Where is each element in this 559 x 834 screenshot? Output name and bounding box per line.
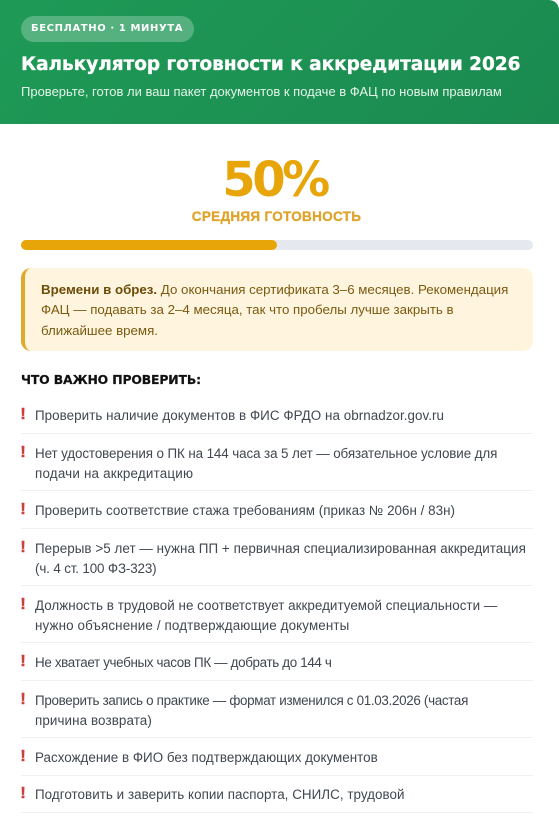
checklist heading: ЧТО ВАЖНО ПРОВЕРИТЬ: <box>21 372 201 387</box>
item 8: ! <box>20 748 26 765</box>
item 3: Проверить соответствие стажа требованиям (приказ № 206н / 83н) <box>35 503 455 518</box>
badge: БЕСПЛАТНО · 1 МИНУТА <box>31 23 183 34</box>
badge <box>21 16 194 42</box>
progress bar <box>21 240 533 250</box>
item 4: (ч. 4 ст. 100 ФЗ-323) <box>35 561 156 576</box>
item 6: Не хватает учебных часов ПК — добрать до 144 ч <box>35 655 332 670</box>
item 8: Расхождение в ФИО без подтверждающих документов <box>35 750 378 765</box>
item 7: Проверить запись о практике — формат изменился с 01.03.2026 (частая <box>35 693 468 708</box>
item 1: ! <box>20 406 26 423</box>
checklist <box>20 406 533 813</box>
item 5: нужно объяснение / подтверждающие документы <box>35 618 349 633</box>
item 7 <box>20 691 468 728</box>
callout text: ФАЦ — подавать за 2–4 месяца, так что пробелы лучше закрыть в <box>41 302 454 317</box>
callout <box>21 268 533 351</box>
item 6: ! <box>20 653 26 670</box>
item 9: Подготовить и заверить копии паспорта, СНИЛС, трудовой <box>35 787 404 802</box>
item 2: подачи на аккредитацию <box>35 466 193 481</box>
callout text: ближайшее время. <box>41 322 158 338</box>
item 2: ! <box>20 444 26 461</box>
item 1: Проверить наличие документов в ФИС ФРДО на obrnadzor.gov.ru <box>35 408 444 423</box>
item 3: ! <box>20 501 26 518</box>
item 7: ! <box>20 691 26 708</box>
callout text <box>41 282 508 338</box>
score value: 50% <box>222 152 327 208</box>
item 4: Перерыв >5 лет — нужна ПП + первичная специализированная аккредитация <box>35 541 526 556</box>
item 7: причина возврата) <box>35 713 152 728</box>
item 5: ! <box>20 596 26 613</box>
callout text: Времени в обрез. До окончания сертификата 3–6 месяцев. Рекомендация <box>41 282 508 296</box>
item 5 <box>20 596 498 633</box>
progress fill <box>21 240 277 250</box>
subtitle: Проверьте, готов ли ваш пакет документов к подаче в ФАЦ по новым правилам <box>21 84 502 99</box>
item 2: Нет удостоверения о ПК на 144 часа за 5 лет — обязательное условие для <box>35 446 497 461</box>
item 9: ! <box>20 785 26 802</box>
header panel <box>0 0 559 124</box>
item 4: ! <box>20 539 26 556</box>
score label: СРЕДНЯЯ ГОТОВНОСТЬ <box>192 209 361 224</box>
item 2 <box>20 444 497 481</box>
title: Калькулятор готовности к аккредитации 2026 <box>21 54 520 75</box>
item 4 <box>20 539 526 576</box>
item 5: Должность в трудовой не соответствует аккредитуемой специальности — <box>35 598 497 613</box>
